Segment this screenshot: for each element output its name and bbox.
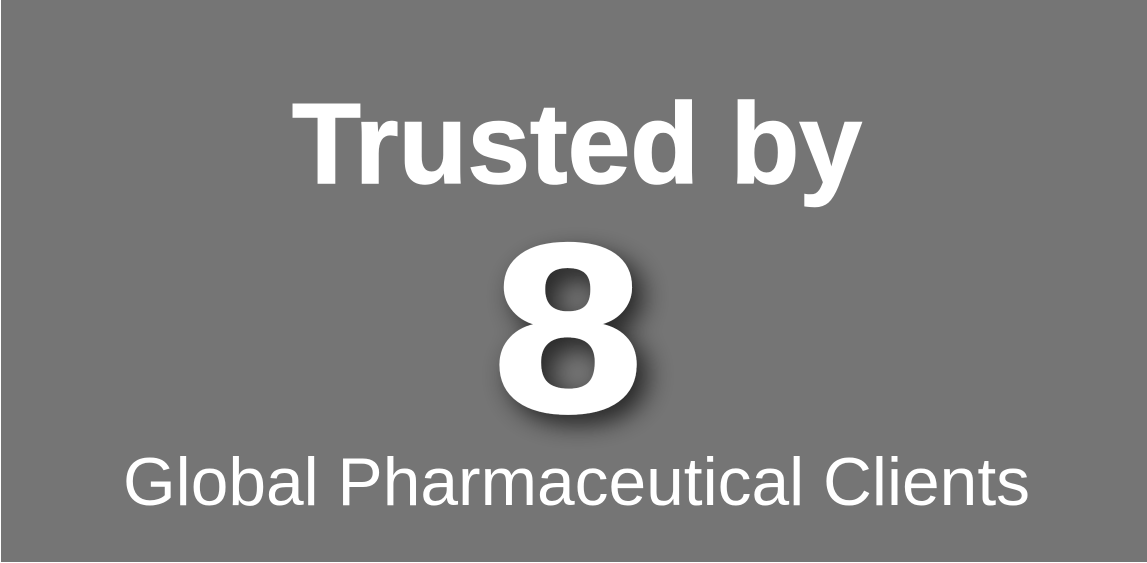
heading: Trusted by: Trusted by [292,81,862,208]
subheading: Global Pharmaceutical Clients: Global Pharmaceutical Clients [123,444,1030,520]
big number 8: 8 [492,195,643,463]
